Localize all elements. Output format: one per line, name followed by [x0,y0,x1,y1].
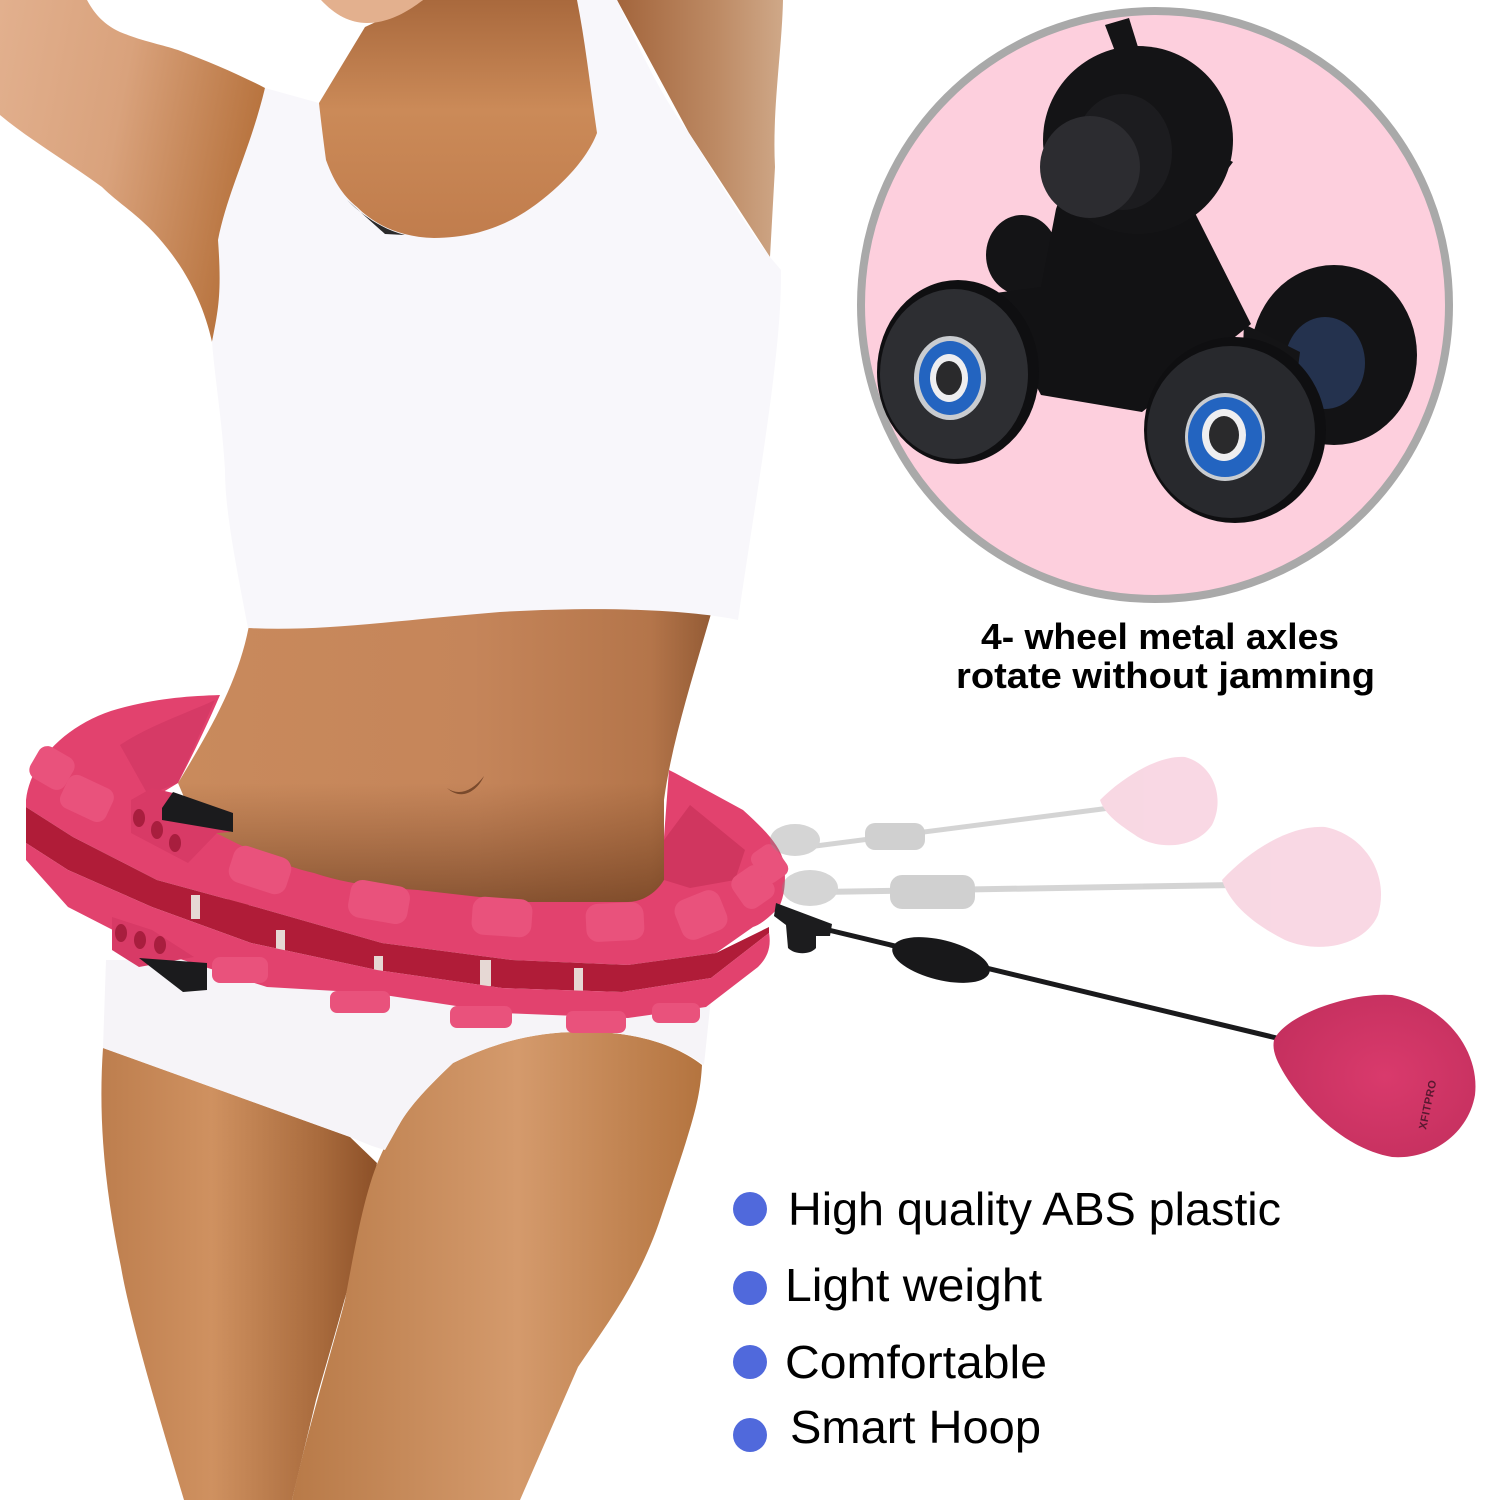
upper clasp holes [133,809,181,852]
feature one: High quality ABS plastic [788,1183,1281,1235]
knob cap [1040,116,1140,218]
bullet two [733,1271,767,1305]
navel [447,776,484,794]
caption line two: rotate without jamming [956,655,1375,696]
weighted ball with cord [774,903,1475,1157]
lower ghost ball [1222,827,1381,947]
caption line one: 4- wheel metal axles [981,616,1339,657]
lower ghost clip [782,870,838,906]
hoop [26,695,791,1033]
lower ghost cord [820,885,1235,892]
bullet three [733,1345,767,1379]
faded weighted ball upper [770,757,1218,856]
faded weighted ball lower [782,827,1381,947]
housing head [1043,46,1233,234]
back left ribs [120,700,215,795]
wheel housing [988,140,1251,412]
upper clasp [131,788,233,863]
midriff lower shading [178,783,664,905]
upper ghost cord [800,808,1110,848]
cord stub [1105,18,1138,54]
cord clip [774,903,832,953]
neck and chest [319,0,600,245]
left arm and shoulder [0,0,265,342]
rear right wheel [1251,265,1417,445]
bullet four [733,1418,767,1452]
rear axle [1240,324,1300,430]
right arm [617,0,783,257]
midriff [178,600,715,905]
feature three: Comfortable [785,1336,1047,1388]
hoop knobs [26,742,791,1033]
lower ghost connector [890,875,975,909]
upper band [26,695,785,965]
upper clasp button [162,792,233,832]
lower clasp button [139,958,207,992]
caption: wheel axles [956,616,1375,696]
cord [820,928,1285,1040]
pink ball [1273,995,1475,1157]
upper ghost clip [770,824,820,856]
right thigh [292,1032,702,1500]
white shorts [103,960,715,1150]
bra edge [347,200,405,235]
lower band [26,843,770,1018]
upper ghost connector [865,823,925,850]
left thigh [101,1048,377,1500]
feature two: Light weight [785,1259,1042,1311]
ball brand label: XFITPRO [1417,1079,1439,1131]
chin [321,0,423,23]
lower clasp holes [115,924,166,954]
hoop gap [26,807,769,992]
left front wheel [877,280,1039,464]
upper ghost ball [1100,757,1218,845]
feature list [733,1183,1281,1453]
back right ribs [664,805,745,888]
right front wheel [1144,337,1326,523]
metal slits [191,895,583,992]
panel: wheel detail circle [861,11,1449,599]
bullet one [733,1192,767,1226]
cord connector [888,928,994,992]
lower clasp [112,917,194,967]
knob cylinder [1074,94,1172,210]
feature four: Smart Hoop [790,1401,1041,1453]
model figure [0,0,783,1500]
circle background [861,11,1449,599]
white tank top [212,0,781,629]
back wheel [986,215,1058,295]
